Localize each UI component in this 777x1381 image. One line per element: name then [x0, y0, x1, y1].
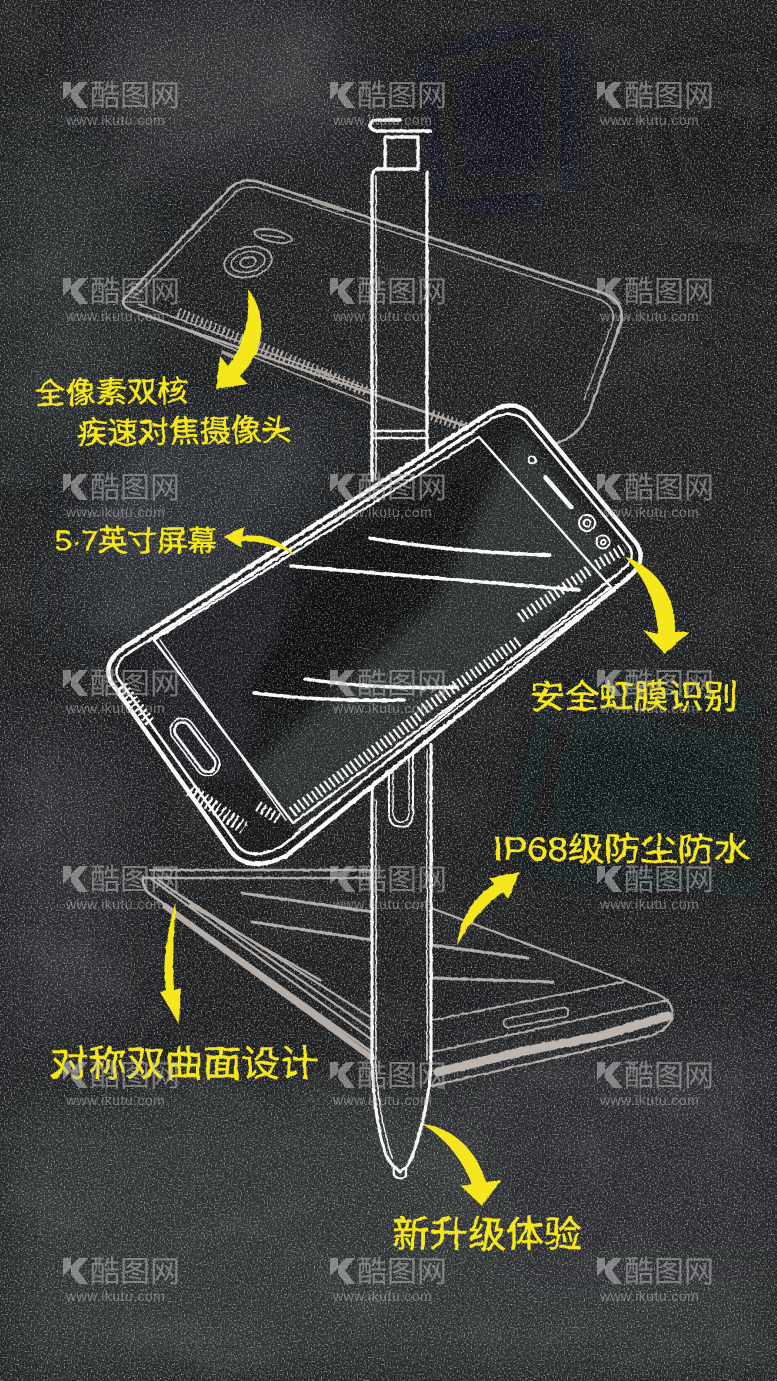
speaker slit: [545, 477, 571, 507]
label: dual curved: [50, 902, 318, 1084]
watermark row 4: [63, 668, 714, 716]
text: dual pixel camera: 疾速对焦摄像头: [77, 412, 292, 451]
text: dual curved design: 对称双曲面设计: [50, 1043, 318, 1084]
watermark row 7: www.ikutu.com: [332, 1288, 432, 1304]
watermark row 6: www.ikutu.com: [65, 1092, 165, 1108]
watermark row 1: 酷图网: [90, 80, 180, 113]
watermark row 2: [63, 276, 714, 324]
arrow: screen: [224, 526, 296, 556]
watermark row 4: 酷图网: [90, 668, 180, 701]
watermark row 5: [63, 864, 714, 912]
pen clip slot: [389, 746, 413, 827]
phone back view (grey, top): [123, 180, 622, 446]
front sensors: [528, 456, 610, 548]
pen lower body: [372, 745, 431, 1172]
watermark row 3: www.ikutu.com: [65, 504, 165, 520]
stylus pen: [370, 120, 431, 1178]
watermark row 2: www.ikutu.com: [599, 308, 699, 324]
hatch: [178, 313, 368, 392]
watermark row 2: 酷图网: [357, 276, 447, 309]
watermark row 6: 酷图网: [357, 1060, 447, 1093]
watermark row 1: [63, 80, 714, 128]
watermark row 5: 酷图网: [624, 864, 714, 897]
watermark row 5: www.ikutu.com: [65, 896, 165, 912]
watermark row 7: www.ikutu.com: [65, 1288, 165, 1304]
text: iris recognition: 安全虹膜识别: [530, 678, 738, 715]
text: upgraded experience: 新升级体验: [392, 1214, 582, 1255]
watermark row 4: www.ikutu.com: [599, 700, 699, 716]
hatching along lower edge: [122, 548, 625, 828]
phone strokes: [108, 406, 641, 864]
watermark row 3: www.ikutu.com: [599, 504, 699, 520]
watermark row 6: [63, 1060, 714, 1108]
label: IP68: [457, 831, 750, 946]
pen cap clip: [370, 120, 430, 131]
watermark row 4: www.ikutu.com: [65, 700, 165, 716]
phone body: [108, 406, 641, 864]
watermark row 3: [63, 472, 714, 520]
arrow: dual curved: [160, 902, 181, 1024]
arrow: camera: [216, 289, 261, 389]
screen outline: [154, 437, 611, 823]
watermark row 6: 酷图网: [90, 1060, 180, 1093]
watermark row 1: www.ikutu.com: [599, 112, 699, 128]
home button: [166, 713, 224, 781]
watermark row 1: 酷图网: [624, 80, 714, 113]
phone side view (grey, bottom): [143, 870, 673, 1086]
watermark row 2: 酷图网: [624, 276, 714, 309]
watermark row 7: [63, 1256, 714, 1304]
watermark row 1: 酷图网: [357, 80, 447, 113]
watermark row 4: 酷图网: [624, 668, 714, 701]
watermark row 2: 酷图网: [90, 276, 180, 309]
watermark row 5: www.ikutu.com: [599, 896, 699, 912]
text: 5.7 inch screen: 5·7英寸屏幕: [55, 525, 217, 558]
watermark row 2: www.ikutu.com: [332, 308, 432, 324]
watermark row 5: www.ikutu.com: [332, 896, 432, 912]
watermark row 4: 酷图网: [357, 668, 447, 701]
label: new experience: [392, 1124, 582, 1255]
watermark row 6: www.ikutu.com: [332, 1092, 432, 1108]
phone fill: [110, 408, 638, 862]
watermark row 4: www.ikutu.com: [332, 700, 432, 716]
arrow: pen: [422, 1124, 501, 1206]
watermark row 3: www.ikutu.com: [332, 504, 432, 520]
arrow: IP68: [457, 872, 520, 946]
watermark row 1: www.ikutu.com: [65, 112, 165, 128]
text: dual pixel camera: 全像素双核: [35, 375, 188, 411]
watermark row 2: www.ikutu.com: [65, 308, 165, 324]
watermark row 7: 酷图网: [90, 1256, 180, 1289]
watermark row 5: 酷图网: [357, 864, 447, 897]
watermark grid: [63, 80, 714, 1304]
text: IP68: IP68级防尘防水: [493, 831, 750, 867]
watermark row 6: www.ikutu.com: [599, 1092, 699, 1108]
watermark row 7: 酷图网: [624, 1256, 714, 1289]
screen glare strokes: [254, 538, 579, 700]
watermark row 5: 酷图网: [90, 864, 180, 897]
watermark row 3: 酷图网: [624, 472, 714, 505]
arrow: iris: [624, 556, 689, 654]
label: screen size: [55, 525, 296, 558]
label: iris: [530, 556, 738, 715]
watermark row 6: 酷图网: [624, 1060, 714, 1093]
label: camera: [35, 289, 292, 451]
text: dual pixel camera: [35, 375, 292, 451]
watermark row 3: 酷图网: [357, 472, 447, 505]
watermark row 3: 酷图网: [90, 472, 180, 505]
watermark row 7: 酷图网: [357, 1256, 447, 1289]
watermark row 1: www.ikutu.com: [332, 112, 432, 128]
watermark row 7: www.ikutu.com: [599, 1288, 699, 1304]
main phone front view: [106, 402, 643, 866]
pen upper body: [372, 169, 427, 480]
